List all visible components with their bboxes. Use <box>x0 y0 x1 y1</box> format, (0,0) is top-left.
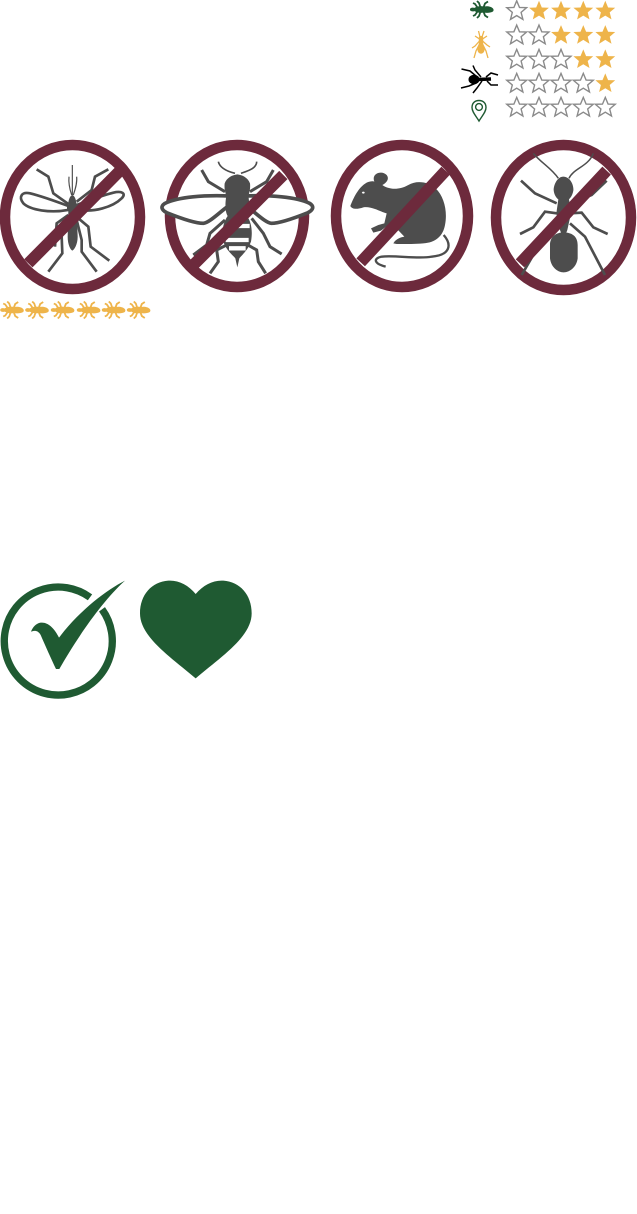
rating row 5 <box>472 97 615 121</box>
rating row 4 <box>461 66 615 93</box>
icon: no mosquitoes <box>5 145 140 289</box>
icon: green termite <box>470 1 494 18</box>
stars: two of five empty <box>507 25 615 44</box>
rating row 1 <box>470 1 615 19</box>
icon: orange ant <box>472 31 490 58</box>
icon: no wasps <box>162 145 313 287</box>
icon: no ants <box>496 145 631 290</box>
icon: check mark in circle <box>4 581 125 695</box>
icon: no rats <box>336 145 468 287</box>
stars: four of five empty <box>507 73 615 92</box>
icon row: gold termites <box>0 302 150 318</box>
rating row 2 <box>472 25 615 58</box>
stars: three of five empty <box>507 49 615 68</box>
stars: all five empty <box>507 97 615 116</box>
icon: heart <box>140 581 252 678</box>
icon: black ant <box>461 66 498 93</box>
stars: one of five empty <box>507 1 615 19</box>
icon: location pin <box>472 100 486 121</box>
